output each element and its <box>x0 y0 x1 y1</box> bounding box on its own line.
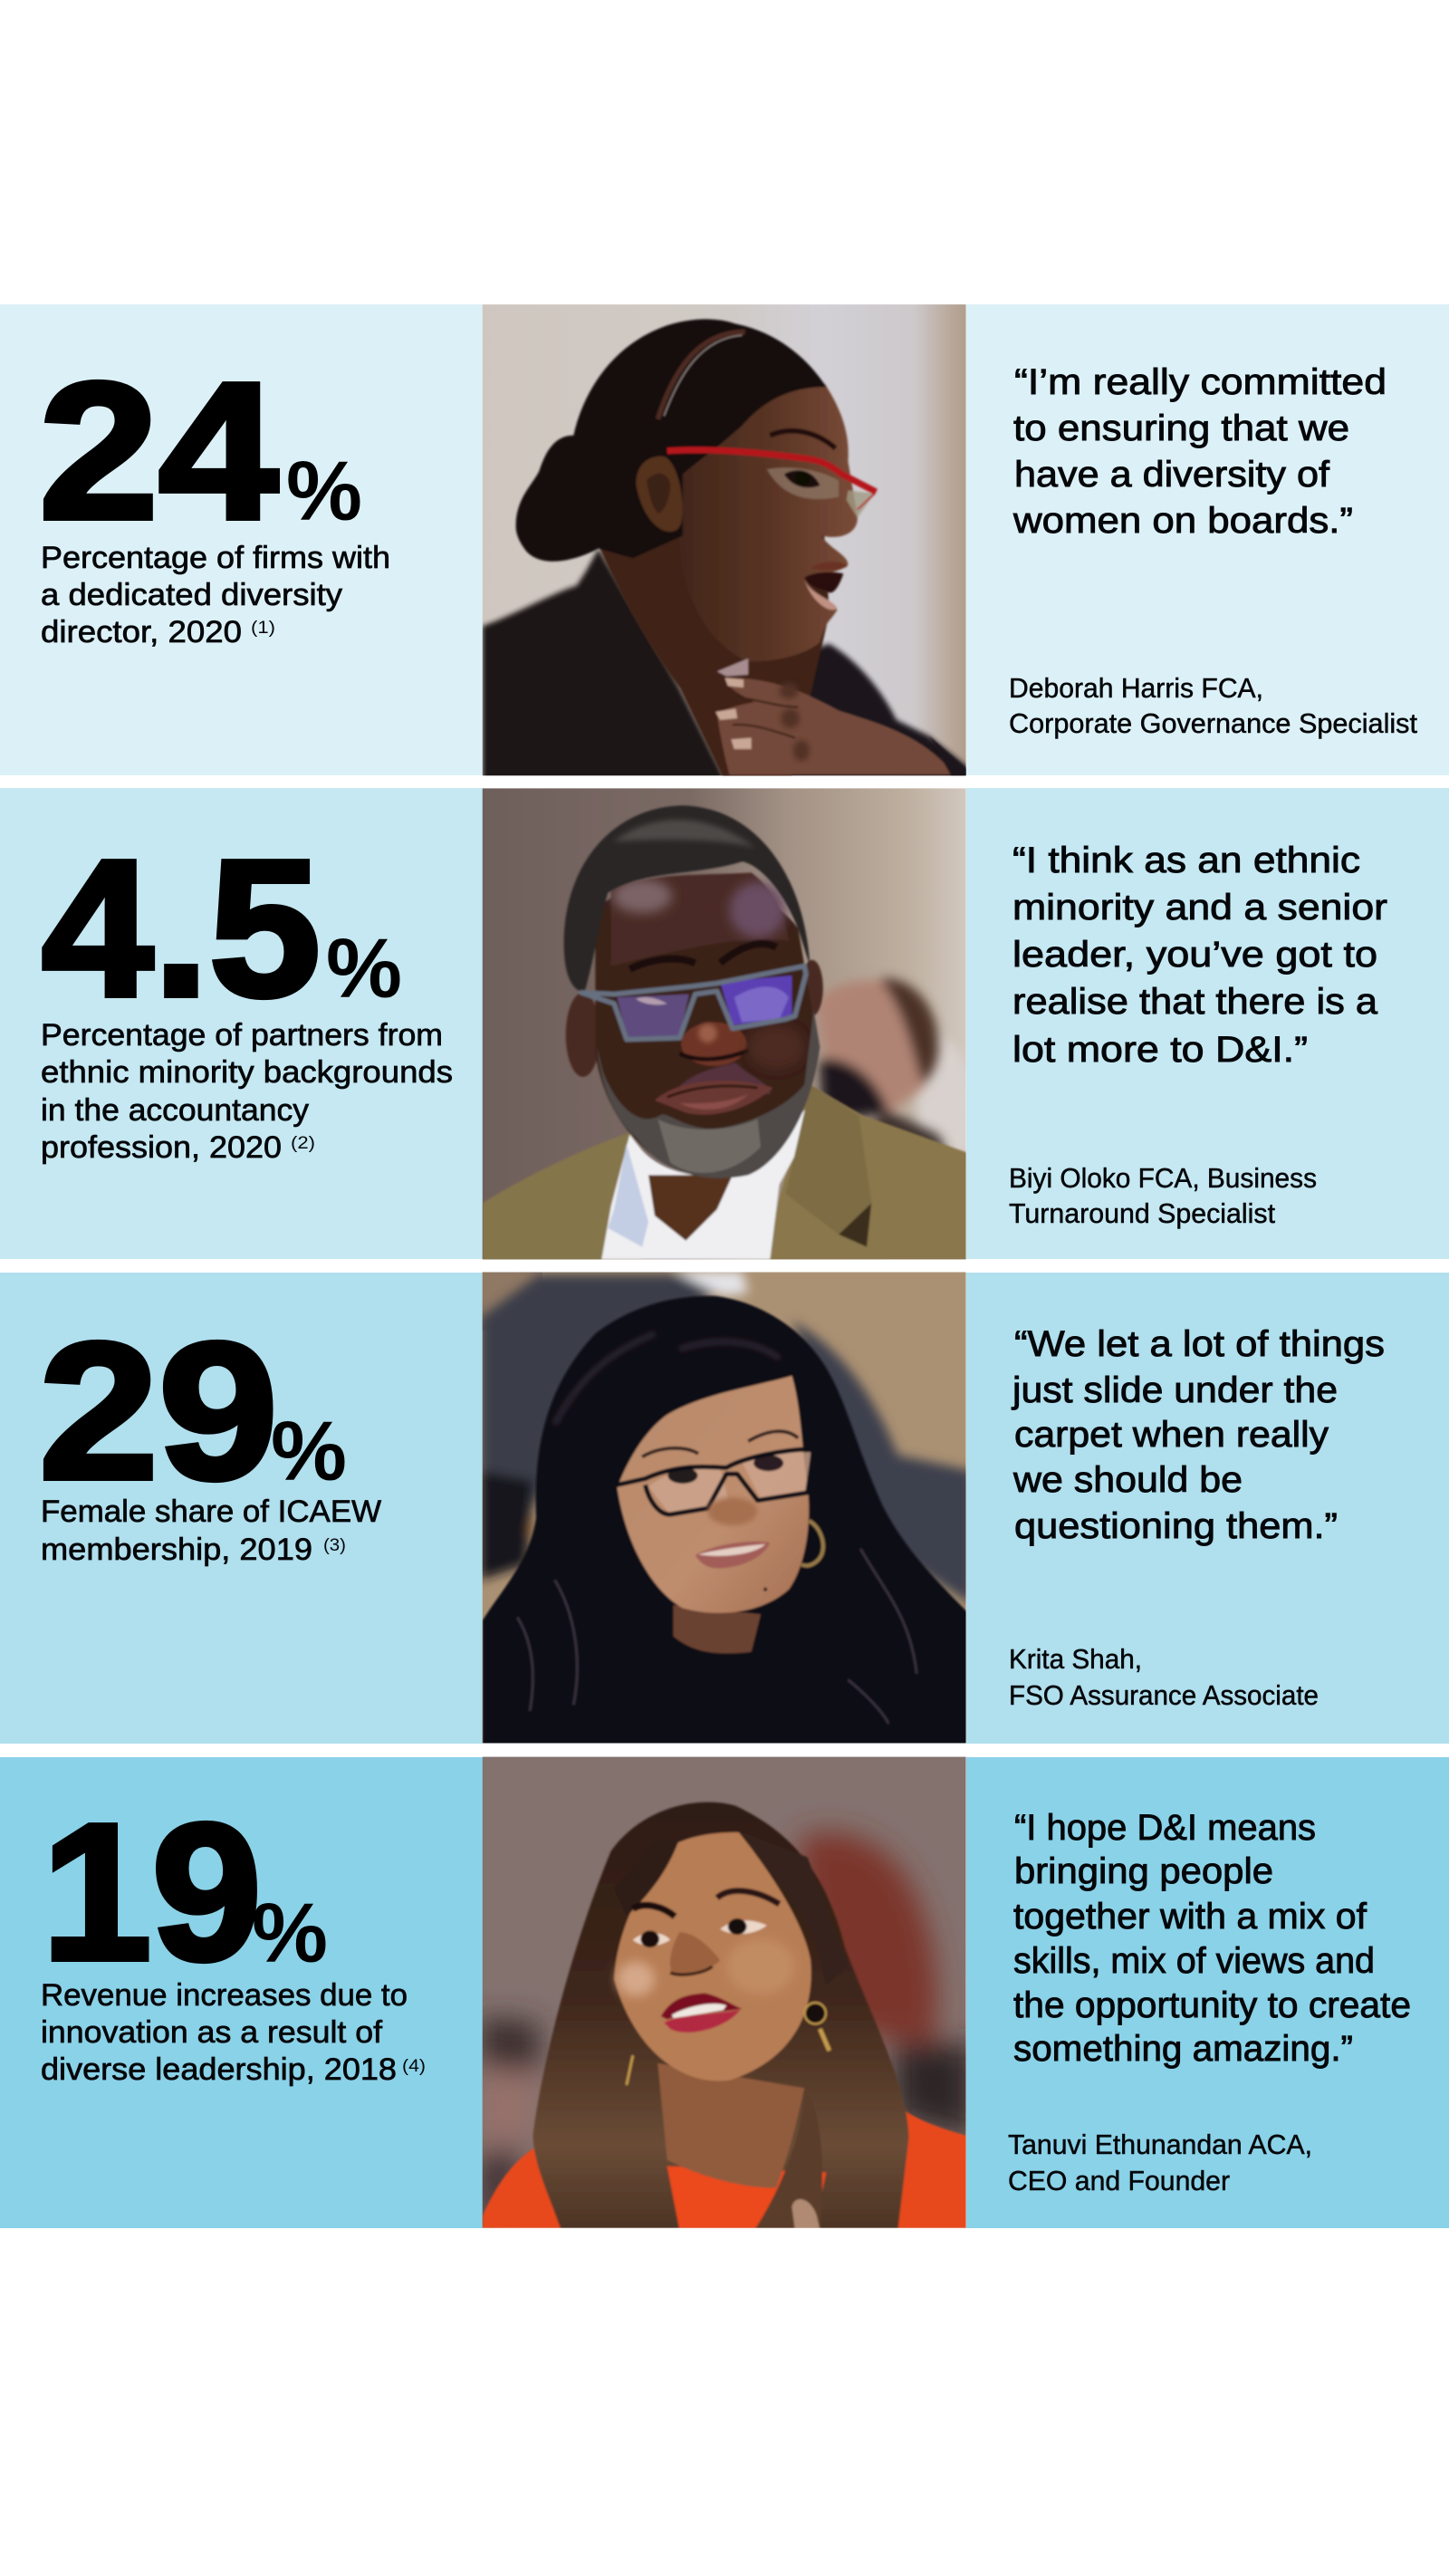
panel: quote Biyi Oloko: Biyi Oloko FCA, Business <box>1009 1162 1317 1194</box>
photo: Tanuvi Ethunandan <box>480 1748 979 2247</box>
panel: statistic 29% <box>0 1273 483 1744</box>
panel: statistic 4.5%: Percentage of partners from <box>41 1018 443 1053</box>
panel: quote Deborah Harris <box>966 304 1449 775</box>
panel: quote Tanuvi Ethunandan: “I hope D&I means <box>1014 1808 1316 1848</box>
panel: quote Krita Shah: “We let a lot of things <box>1014 1324 1385 1364</box>
panel: quote Tanuvi Ethunandan <box>966 1757 1449 2228</box>
panel: quote Tanuvi Ethunandan: bringing people <box>1014 1851 1273 1891</box>
panel: statistic 4.5%: in the accountancy <box>41 1093 309 1128</box>
row 4 <box>0 1748 1449 2247</box>
panel: quote Tanuvi Ethunandan: skills, mix of views and <box>1013 1941 1375 1981</box>
panel: statistic 24% <box>0 304 483 775</box>
panel: quote Deborah Harris: women on boards.” <box>1012 501 1353 541</box>
panel: statistic 19% <box>0 1757 483 2228</box>
panel: quote Biyi Oloko: minority and a senior <box>1012 888 1387 928</box>
panel: quote Biyi Oloko: lot more to D&I.” <box>1012 1030 1308 1070</box>
panel: statistic 24%: a dedicated diversity <box>41 578 342 612</box>
panel: statistic 29%: 29 <box>39 1302 278 1520</box>
row 3 <box>0 1268 1449 1767</box>
panel: quote Krita Shah: just slide under the <box>1012 1370 1338 1410</box>
panel: statistic 29%: (3) <box>323 1536 346 1555</box>
panel: statistic 19%: diverse leadership, 2018 <box>41 2052 397 2087</box>
panel: quote Tanuvi Ethunandan: CEO and Founder <box>1008 2165 1230 2196</box>
panel: quote Tanuvi Ethunandan: something amazing.” <box>1013 2029 1353 2069</box>
panel: quote Deborah Harris: have a diversity of <box>1014 455 1330 495</box>
panel: statistic 24%: Percentage of firms with <box>41 541 390 575</box>
panel: quote Deborah Harris: Deborah Harris FCA, <box>1009 672 1263 704</box>
panel: statistic 4.5%: % <box>326 921 402 1015</box>
row 2 <box>0 779 1449 1278</box>
panel: statistic 29%: membership, 2019 <box>41 1533 312 1567</box>
panel: quote Deborah Harris: “I’m really committed <box>1014 362 1387 402</box>
panel: quote Krita Shah: Krita Shah, <box>1009 1643 1142 1675</box>
panel: statistic 24%: 24 <box>39 341 278 560</box>
panel: quote Biyi Oloko: realise that there is a <box>1012 982 1378 1022</box>
panel: statistic 24%: % <box>286 444 362 538</box>
panel: quote Biyi Oloko: Turnaround Specialist <box>1009 1197 1275 1229</box>
photo: Deborah Harris <box>482 304 966 775</box>
panel: quote Krita Shah: FSO Assurance Associate <box>1009 1679 1319 1711</box>
panel: statistic 4.5%: 4.5 <box>42 819 321 1037</box>
panel: statistic 4.5% <box>0 788 483 1259</box>
panel: statistic 19%: % <box>252 1886 328 1980</box>
panel: quote Tanuvi Ethunandan: the opportunity to create <box>1013 1985 1411 2025</box>
panel: statistic 19%: innovation as a result of <box>41 2015 383 2050</box>
panel: quote Biyi Oloko: “I think as an ethnic <box>1012 841 1360 880</box>
panel: statistic 19%: Revenue increases due to <box>41 1978 408 2013</box>
panel: quote Krita Shah: questioning them.” <box>1014 1506 1338 1546</box>
panel: quote Deborah Harris: to ensuring that we <box>1013 409 1349 448</box>
panel: quote Krita Shah <box>966 1273 1449 1744</box>
panel: quote Tanuvi Ethunandan: Tanuvi Ethunandan ACA, <box>1008 2129 1312 2160</box>
panel: statistic 19%: (4) <box>402 2057 426 2076</box>
panel: statistic 19%: 19 <box>42 1783 262 2001</box>
panel: quote Krita Shah: we should be <box>1012 1460 1243 1500</box>
panel: quote Deborah Harris: Corporate Governance Specialist <box>1009 707 1417 739</box>
panel: statistic 4.5%: (2) <box>291 1134 315 1153</box>
photo: Biyi Oloko <box>480 779 979 1278</box>
panel: quote Biyi Oloko <box>966 788 1449 1259</box>
panel: statistic 24%: (1) <box>251 619 275 638</box>
photo: Krita Shah <box>480 1268 979 1767</box>
panel: statistic 29%: % <box>271 1404 347 1498</box>
row 1 <box>0 290 1449 807</box>
panel: statistic 4.5%: ethnic minority backgrounds <box>41 1055 453 1090</box>
panel: quote Tanuvi Ethunandan: together with a mix of <box>1013 1897 1367 1937</box>
infographic canvas <box>0 304 1449 2228</box>
panel: quote Biyi Oloko: leader, you’ve got to <box>1012 935 1377 975</box>
panel: statistic 29%: Female share of ICAEW <box>41 1495 381 1529</box>
panel: statistic 24%: director, 2020 <box>41 615 242 649</box>
panel: statistic 4.5%: profession, 2020 <box>41 1130 282 1165</box>
panel: quote Krita Shah: carpet when really <box>1014 1415 1329 1455</box>
